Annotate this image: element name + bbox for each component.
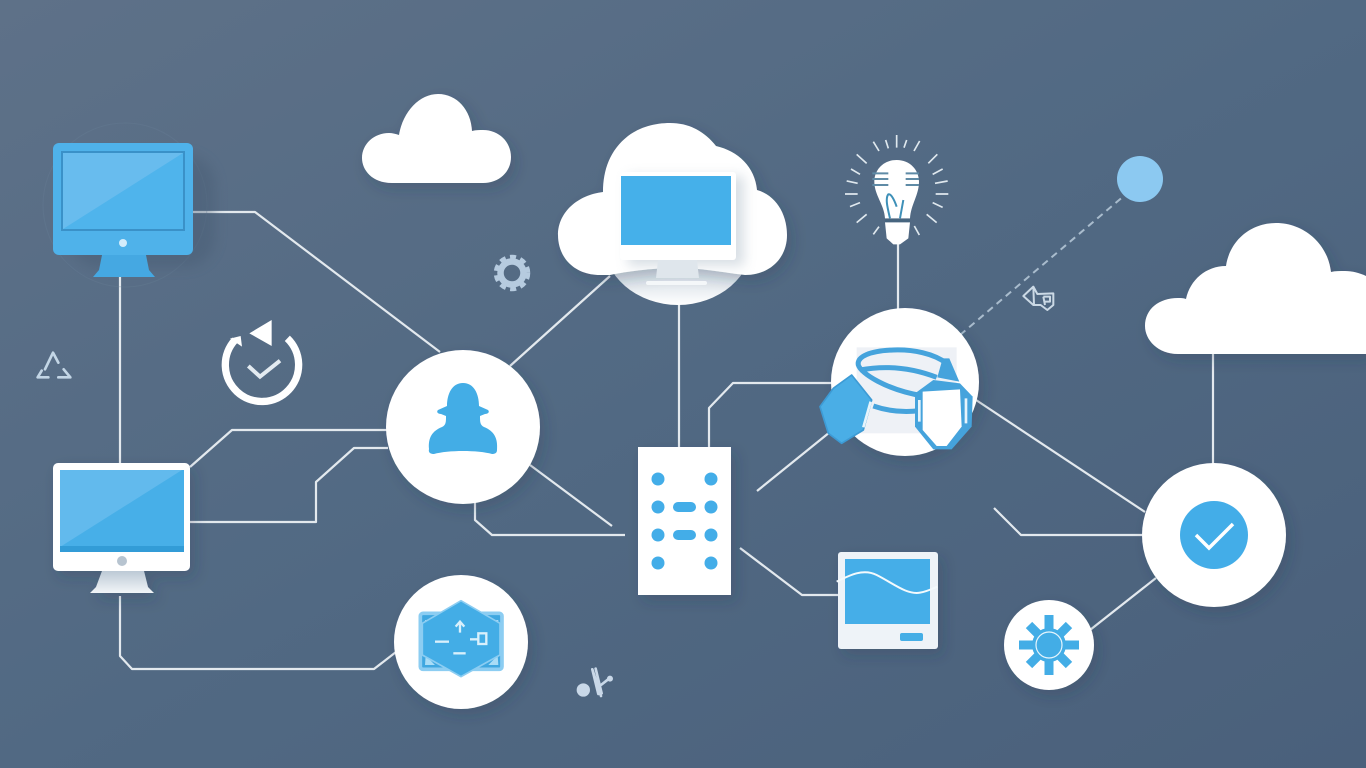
- icon: small dot and note: [577, 669, 613, 697]
- icon: server panel: [638, 447, 731, 595]
- icon: tablet chart: [837, 552, 938, 649]
- icon: check circle: [1142, 463, 1286, 607]
- connector lines: [120, 212, 1213, 669]
- icon: recycle triangle: [38, 353, 70, 377]
- icon: cable circle: [820, 308, 979, 456]
- icon: central cloud with monitor: [558, 123, 787, 305]
- icon: top-left monitor: [43, 123, 215, 287]
- icon: large right cloud: [1145, 223, 1366, 354]
- icon: gear circle: [1004, 600, 1094, 690]
- icon: chip circle: [394, 575, 528, 709]
- icon: refresh check: [225, 320, 299, 401]
- icon: lower-left monitor: [53, 463, 190, 593]
- icon: small outline glyph: [1023, 287, 1053, 310]
- icon: top small cloud: [362, 94, 511, 183]
- dashed connector: [960, 195, 1125, 335]
- icon: person circle: [386, 350, 540, 504]
- icon: light bulb: [845, 135, 948, 244]
- icon: blue dot: [1117, 156, 1163, 202]
- icon: gear small: [496, 257, 528, 289]
